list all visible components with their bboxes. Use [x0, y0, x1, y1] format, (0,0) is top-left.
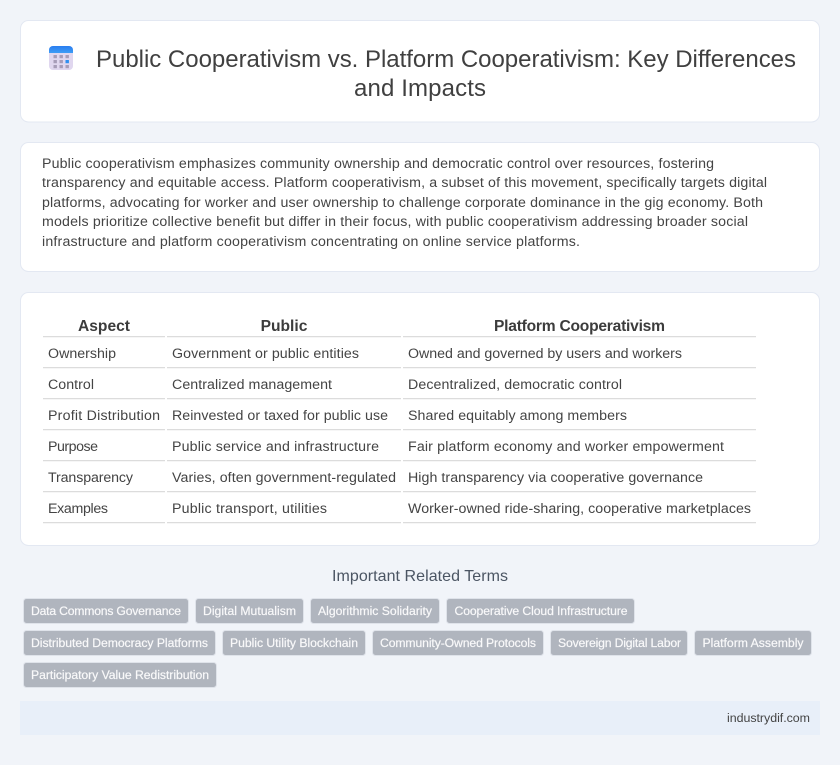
- row: profit distribution: Profit Distribution: [48, 408, 160, 424]
- heading: important related terms: Important Related Terms: [332, 568, 508, 585]
- tag: Sovereign Digital Labor: [558, 636, 681, 650]
- table header row: [43, 318, 756, 337]
- tag: Participatory Value Redistribution: [31, 668, 209, 682]
- title: Public Cooperativism vs. Platform Cooperativism: Key Differences: [96, 46, 796, 73]
- tag: Platform Assembly: [702, 636, 804, 650]
- row: profit distribution: [43, 408, 756, 430]
- tag: [694, 630, 812, 656]
- summary text: Public cooperativism emphasizes community ownership and democratic control over resources, fostering: [42, 156, 714, 172]
- row: transparency: [43, 470, 756, 492]
- table header row: Public: [261, 318, 308, 335]
- row: ownership: Owned and governed by users and workers: [408, 346, 682, 362]
- table header row: Platform Cooperativism: [494, 318, 665, 335]
- tag: [372, 630, 544, 656]
- footer: industrydif.com: [727, 711, 810, 725]
- icon: calendar: [49, 46, 73, 70]
- title: [96, 46, 796, 102]
- footer: [20, 701, 820, 735]
- tag: Algorithmic Solidarity: [318, 604, 433, 618]
- row: control: Centralized management: [172, 377, 332, 393]
- row: examples: Public transport, utilities: [172, 501, 327, 517]
- summary text: platforms, advocating for worker and user ownership to challenge corporate dominance in the gig economy. Both: [42, 195, 763, 211]
- tag: [446, 598, 634, 624]
- tag: Cooperative Cloud Infrastructure: [454, 604, 628, 618]
- tag: [24, 662, 216, 688]
- tag: Community-Owned Protocols: [380, 636, 536, 650]
- row: transparency: High transparency via cooperative governance: [408, 470, 703, 486]
- row: purpose: Public service and infrastructure: [172, 439, 379, 455]
- row: purpose: [43, 439, 756, 461]
- row: examples: [43, 501, 756, 523]
- panel: summary paragraph: [20, 142, 820, 272]
- panel: comparison table: [20, 292, 820, 546]
- row: purpose: Purpose: [48, 439, 98, 455]
- tag: [222, 630, 366, 656]
- row: examples: Worker-owned ride-sharing, cooperative marketplaces: [408, 501, 751, 517]
- row: purpose: Fair platform economy and worker empowerment: [408, 439, 724, 455]
- summary text: infrastructure and platform cooperativism concentrating on online service platforms.: [42, 234, 580, 250]
- row: transparency: Transparency: [48, 470, 134, 486]
- tag: Data Commons Governance: [31, 604, 181, 618]
- row: transparency: Varies, often government-regulated: [172, 470, 396, 486]
- row: profit distribution: Reinvested or taxed for public use: [172, 408, 388, 424]
- row: control: [43, 377, 756, 399]
- tag: [24, 630, 216, 656]
- tag: Digital Mutualism: [203, 604, 296, 618]
- tag: [24, 598, 188, 624]
- row: control: Decentralized, democratic control: [408, 377, 622, 393]
- tag: [310, 598, 440, 624]
- row: examples: Examples: [48, 501, 108, 517]
- row: profit distribution: Shared equitably among members: [408, 408, 627, 424]
- title: and Impacts: [354, 75, 486, 102]
- related terms tags: [24, 598, 812, 688]
- summary text: models prioritize collective benefit but differ in their focus, with public cooperativism addressing broader social: [42, 214, 748, 230]
- tag: [550, 630, 688, 656]
- row: ownership: Ownership: [48, 346, 116, 362]
- row: ownership: [43, 346, 756, 368]
- tag: Distributed Democracy Platforms: [31, 636, 208, 650]
- table header row: Aspect: [78, 318, 130, 335]
- panel: title card: [20, 20, 820, 122]
- row: control: Control: [48, 377, 94, 393]
- tag: [196, 598, 304, 624]
- summary text: transparency and equitable access. Platform cooperativism, a subset of this movement, specifically targets digital: [42, 175, 767, 191]
- row: ownership: Government or public entities: [172, 346, 359, 362]
- summary text: [42, 156, 767, 250]
- tag: Public Utility Blockchain: [230, 636, 358, 650]
